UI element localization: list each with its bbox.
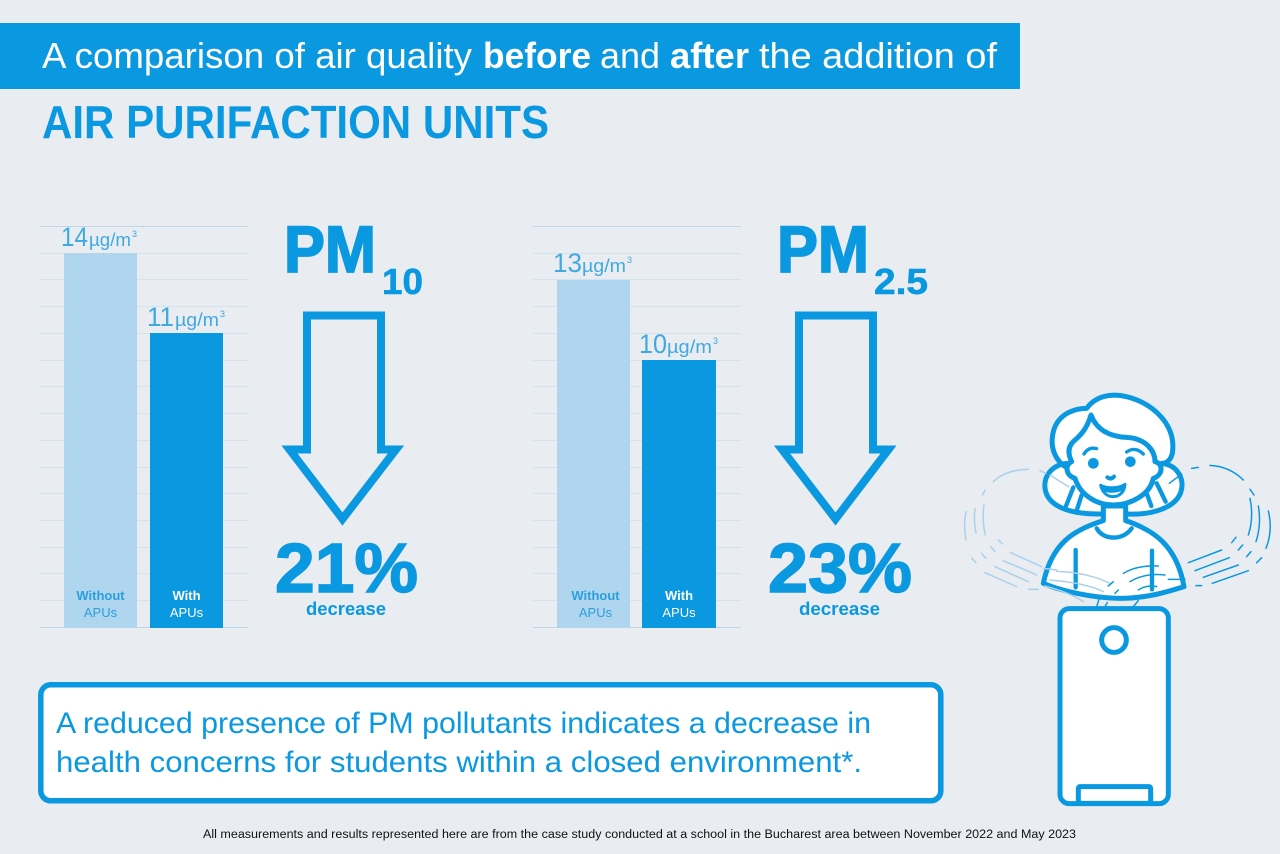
arrow: down — [290, 316, 396, 519]
bar label: without APUs: APUs — [579, 605, 613, 620]
header banner: before — [483, 35, 591, 76]
bar label: with APUs — [170, 588, 204, 620]
neck and body — [1043, 506, 1184, 598]
stat: 21% decrease: decrease — [306, 598, 386, 619]
value label: 13: 3 — [627, 255, 632, 265]
header banner: A comparison of air quality — [42, 35, 472, 76]
value label: 10: µg/m — [667, 337, 712, 357]
heading: PM10 — [284, 212, 423, 302]
callout: A reduced presence of PM pollutants indicates a decrease in — [56, 707, 871, 740]
callout: health concerns for students within a closed environment*. — [56, 746, 862, 779]
header banner: after — [670, 35, 749, 76]
nose — [1107, 477, 1114, 479]
bar label: with APUs: With — [172, 588, 201, 603]
bar label: with APUs: With — [665, 588, 693, 603]
heading: PM2.5: 2.5 — [874, 261, 928, 302]
value label: 14: µg/m — [89, 230, 131, 250]
bar: with APUs — [642, 360, 716, 628]
heading: PM2.5 — [777, 212, 928, 302]
bar label: without APUs — [76, 588, 125, 620]
bar label: without APUs: Without — [571, 588, 620, 603]
eyes — [1088, 458, 1099, 469]
value label: 10: 3 — [713, 336, 718, 346]
airflow lines: left — [965, 469, 1110, 602]
mouth — [1101, 484, 1125, 497]
value label: 10 — [639, 329, 718, 359]
stat: 21% decrease: 21% — [275, 529, 418, 607]
title: AIR PURIFACTION UNITS — [42, 96, 549, 148]
airflow lines: right — [1097, 465, 1270, 607]
heading: PM2.5: PM — [777, 212, 869, 286]
callout — [41, 685, 941, 801]
heading: PM10: 10 — [382, 261, 423, 302]
panel: PM2.5 — [533, 212, 928, 628]
value label: 14 — [61, 222, 137, 252]
bar chart: PM10 — [40, 222, 248, 628]
header banner: and — [600, 35, 660, 76]
bar label: with APUs: APUs — [170, 605, 204, 620]
illustration: student and air purifier — [965, 395, 1270, 804]
footnote: All measurements and results represented here are from the case study conducted at a school in the Bucharest area between November 2022 and May 2023 — [203, 829, 1076, 841]
value label: 11: 3 — [220, 309, 225, 319]
value label: 13: 13 — [553, 248, 582, 278]
value label: 13: µg/m — [582, 256, 626, 276]
value label: 11: 11 — [147, 302, 174, 332]
bar label: with APUs: APUs — [662, 605, 696, 620]
hair — [1045, 395, 1182, 514]
header banner — [0, 23, 1020, 89]
bar label: without APUs: Without — [76, 588, 125, 603]
icon: student — [1043, 395, 1184, 598]
header banner: the addition of — [759, 35, 998, 76]
value label: 13 — [553, 248, 632, 278]
bar chart: PM2.5 — [533, 226, 741, 628]
value label: 11 — [147, 302, 225, 332]
bar: without APUs — [64, 253, 137, 628]
bar label: without APUs — [571, 588, 620, 620]
stat: 23% decrease: 23% — [768, 529, 912, 607]
bar label: with APUs — [662, 588, 696, 620]
icon: air purifier — [1060, 609, 1168, 804]
face — [1067, 415, 1161, 505]
bar: with APUs — [150, 333, 223, 628]
bar: without APUs — [557, 280, 630, 628]
bar label: without APUs: APUs — [84, 605, 118, 620]
value label: 14: 14 — [61, 222, 88, 252]
value label: 11: µg/m — [175, 310, 219, 330]
arrow: down — [782, 316, 888, 519]
stat: 23% decrease: decrease — [799, 598, 880, 619]
panel: PM10 — [40, 212, 423, 628]
value label: 14: 3 — [132, 229, 137, 239]
heading: PM10: PM — [284, 212, 376, 286]
value label: 10: 10 — [639, 329, 667, 359]
